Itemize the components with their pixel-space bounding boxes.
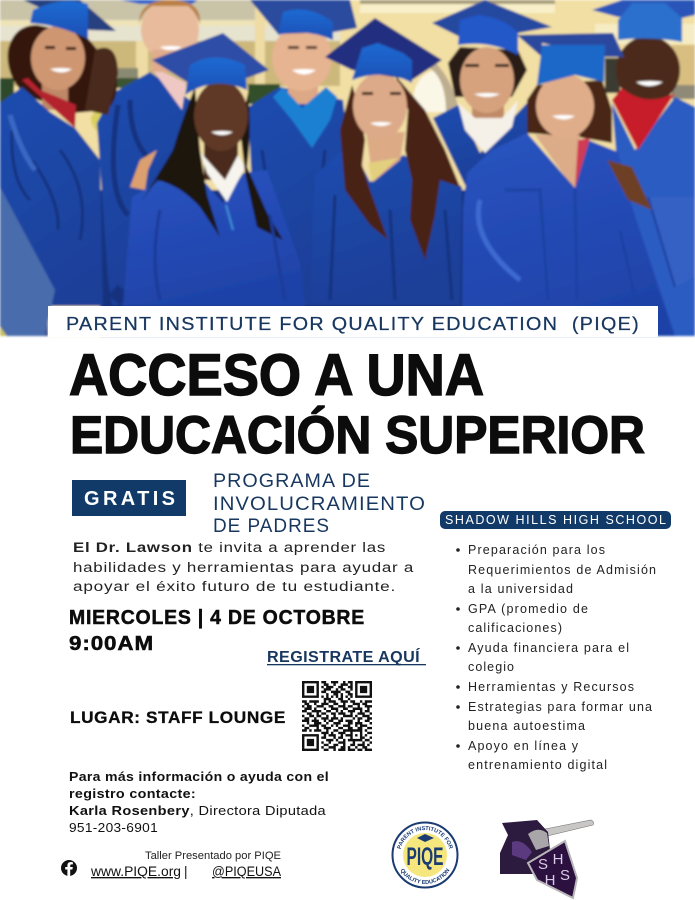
bullet list: topics: Herramientas y Recursos <box>468 680 634 694</box>
bullet list: topics: a la universidad <box>468 582 573 596</box>
student 3: woman with long black hair <box>123 33 305 306</box>
student 5: woman with long brown hair <box>310 18 462 305</box>
gown mass behind <box>100 190 670 336</box>
bullet list: topics: buena autoestima <box>468 719 585 733</box>
bullet list: topics: entrenamiento digital <box>468 758 607 772</box>
photo: graduating students <box>0 0 695 336</box>
invitation paragraph: habilidades y herramientas para ayudar a <box>73 560 414 575</box>
bullet list: topics: Preparación para los <box>468 543 605 557</box>
student 2: back boy <box>97 0 200 305</box>
date and time <box>69 607 365 655</box>
programme heading: DE PADRES <box>213 516 330 537</box>
title: EDUCACIÓN SUPERIOR <box>70 405 645 465</box>
QR code <box>302 681 372 751</box>
invitation paragraph: El Dr. Lawson te invita a aprender las <box>73 540 386 555</box>
registration link: REGISTRATE AQUÍ <box>267 647 420 666</box>
programme heading: PROGRAMA DE <box>213 471 371 492</box>
logo: PIQE: PIQE <box>406 843 444 871</box>
building backdrop <box>0 0 695 336</box>
programme heading: INVOLUCRAMIENTO <box>213 494 426 515</box>
logo: PIQE: PARENT INSTITUTE FOR <box>397 826 453 849</box>
contact details: registro contacte: <box>69 786 196 801</box>
student 8: man in red shirt <box>592 0 695 336</box>
student 6: curly-haired man <box>432 0 552 190</box>
date and time: MIERCOLES | 4 DE OCTOBRE <box>69 607 365 629</box>
contact details: 951-203-6901 <box>69 820 158 835</box>
bullet list: topics: colegio <box>468 660 514 674</box>
student 4: boy in blue polo <box>248 0 357 305</box>
contact details <box>69 769 329 835</box>
contact details: Karla Rosenbery , Directora Diputada <box>69 803 327 818</box>
logo: PIQE: QUALITY EDUCATION <box>400 868 450 884</box>
badge: gratis <box>72 480 186 516</box>
logo: Shadow Hills knight: H <box>553 851 563 868</box>
website and social links: www.PIQE.org <box>90 864 181 879</box>
website and social links <box>90 864 281 879</box>
programme heading <box>213 471 426 537</box>
location: LUGAR: STAFF LOUNGE <box>70 709 286 727</box>
student 1: left woman <box>0 0 118 336</box>
title: ACCESO A UNA <box>69 343 484 408</box>
logo: Shadow Hills knight <box>500 820 594 898</box>
date and time: 9:00AM <box>69 633 154 655</box>
bullet list: topics: Ayuda financiera para el <box>468 641 629 655</box>
invitation paragraph: apoyar el éxito futuro de tu estudiante. <box>73 579 396 594</box>
logo: PIQE <box>392 822 458 888</box>
bullet list: topics: Estrategias para formar una <box>468 700 652 714</box>
invitation paragraph <box>73 540 414 594</box>
icon: facebook <box>61 860 77 876</box>
website and social links: | <box>184 864 188 879</box>
title <box>69 343 645 465</box>
presenter credit: Taller Presentado por PIQE <box>145 850 281 862</box>
logo: Shadow Hills knight: S <box>538 856 548 873</box>
contact details: Para más información o ayuda con el <box>69 769 329 784</box>
banner: organisation name: PARENT INSTITUTE FOR QUALITY EDUCATION (PIQE) <box>66 314 640 334</box>
bullet list: topics: Requerimientos de Admisión <box>468 563 656 577</box>
banner: organisation name <box>48 306 658 337</box>
logo: Shadow Hills knight: H <box>545 872 555 889</box>
student 7: right woman <box>462 33 675 336</box>
bullet list: topics: calificaciones) <box>468 621 562 635</box>
badge: gratis: GRATIS <box>84 488 175 510</box>
bullet list: topics: Apoyo en línea y <box>468 739 579 753</box>
website and social links: @PIQEUSA <box>212 864 281 879</box>
logo: Shadow Hills knight: S <box>560 867 570 884</box>
bullet list: topics: GPA (promedio de <box>468 602 588 616</box>
badge: school name: SHADOW HILLS HIGH SCHOOL <box>445 513 666 527</box>
bullet list: topics <box>456 543 656 772</box>
